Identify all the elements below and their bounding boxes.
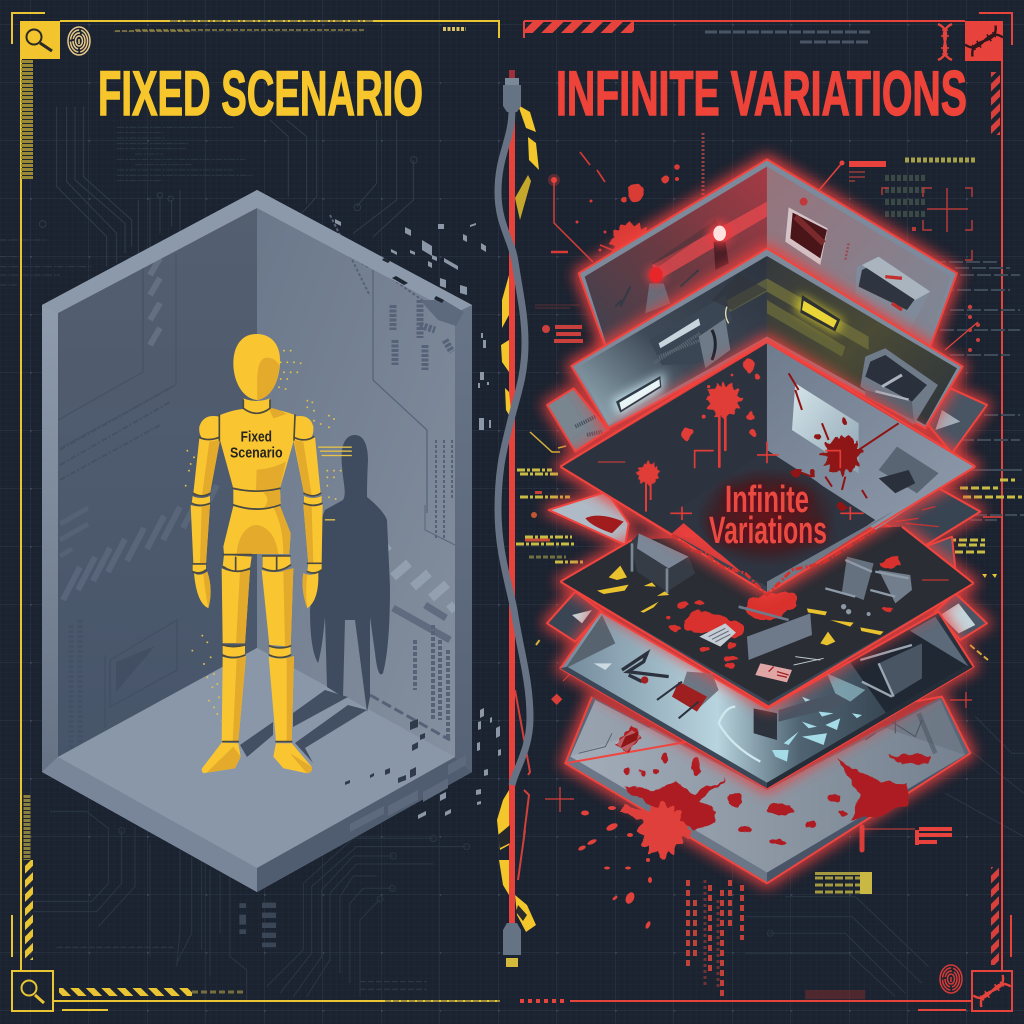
isometric room — [42, 190, 501, 892]
room: left wall edge — [42, 305, 58, 772]
layer 4: paper sheets — [699, 623, 736, 647]
layer 3: targeting marks — [670, 442, 864, 520]
icon: DNA outline — [938, 24, 952, 60]
layer 6: bloody floor room — [565, 697, 970, 883]
room: left wall — [58, 208, 257, 757]
layer 4: caution tape and markers — [597, 566, 884, 645]
layer 6: blood pools — [615, 727, 932, 845]
title: fixed scenario: FIXED SCENARIO — [98, 59, 423, 129]
splatter: lower left of floor room — [578, 804, 690, 929]
layer 2: cold light — [612, 372, 665, 417]
dissolve particles — [185, 350, 352, 721]
layer 5: blue lit room — [560, 612, 974, 788]
circuit traces: bottom left — [33, 812, 470, 1000]
room: base left side — [42, 757, 257, 892]
layer 3 side walls — [547, 388, 987, 453]
icon: magnifier badge — [20, 21, 60, 59]
cable: red strands — [515, 690, 530, 880]
layer 3: lit window — [792, 383, 859, 473]
icon: fingerprint yellow — [68, 27, 90, 55]
label: Infinite Variations: Variations — [709, 510, 827, 552]
layer 4 side walls — [549, 488, 980, 568]
room: right wall edge — [455, 305, 472, 772]
layer 1: red lit room — [579, 159, 957, 347]
layer 5: overturned table and chair — [622, 653, 669, 682]
connector: bottom — [503, 923, 521, 967]
yellow frame — [12, 13, 500, 1010]
label: Infinite Variations — [709, 479, 827, 552]
label: Infinite Variations: Infinite — [725, 479, 809, 521]
caution tape ribbon — [497, 105, 539, 932]
right panel HUD details — [516, 133, 1024, 1000]
layer 2: yellow light — [795, 293, 844, 335]
label: Infinite Variations: Variations — [709, 510, 827, 552]
layer 5: glass shards — [772, 673, 865, 762]
icon: DNA outlined badge — [972, 971, 1012, 1011]
icon: fingerprint red — [940, 965, 962, 993]
layer 2: shelf — [860, 348, 938, 425]
room: base right side — [257, 757, 472, 892]
layer 5 side walls — [547, 592, 987, 642]
layer 4: fallen panel — [747, 613, 812, 660]
cable: grey wave — [498, 110, 530, 785]
label: Infinite Variations: Infinite — [725, 479, 809, 521]
circuit traces: top left — [0, 32, 417, 285]
layer 4: desk — [630, 533, 695, 592]
layer 1: shelf — [855, 257, 930, 332]
layer 4: blood pools — [666, 555, 900, 669]
icon: magnifier outlined badge — [12, 971, 53, 1011]
room: digital fragments — [335, 219, 501, 832]
layer 2: laptop and panel — [649, 295, 732, 365]
red frame — [520, 13, 1012, 1010]
room: top rim — [42, 190, 472, 313]
room: floor — [58, 648, 455, 868]
layer 4: chair — [842, 557, 874, 600]
layer 5: dark box and chair — [754, 708, 777, 740]
layer 1: red light beams — [652, 202, 767, 280]
mannequin: Fixed Scenario: Scenario — [230, 445, 283, 461]
connector: top — [503, 70, 521, 112]
mannequin: Fixed Scenario — [185, 334, 352, 773]
layer 2: yellow lit room — [571, 248, 963, 428]
chest label: Fixed — [241, 429, 272, 445]
layer 1: wall monitor — [785, 207, 828, 265]
cable: red wire — [509, 105, 515, 923]
circuit traces: bottom right — [745, 717, 1024, 999]
layer 4: crime scene floor — [560, 527, 974, 707]
layer 1: alarm beacons — [714, 242, 729, 270]
splatter: upper left — [551, 152, 680, 262]
room: cast shadow — [240, 435, 390, 763]
layer 3: blood splattered room — [560, 339, 975, 595]
icon: DNA red badge — [965, 21, 1003, 61]
layer 3: blood splats — [598, 360, 760, 512]
room: right wall — [257, 208, 455, 757]
